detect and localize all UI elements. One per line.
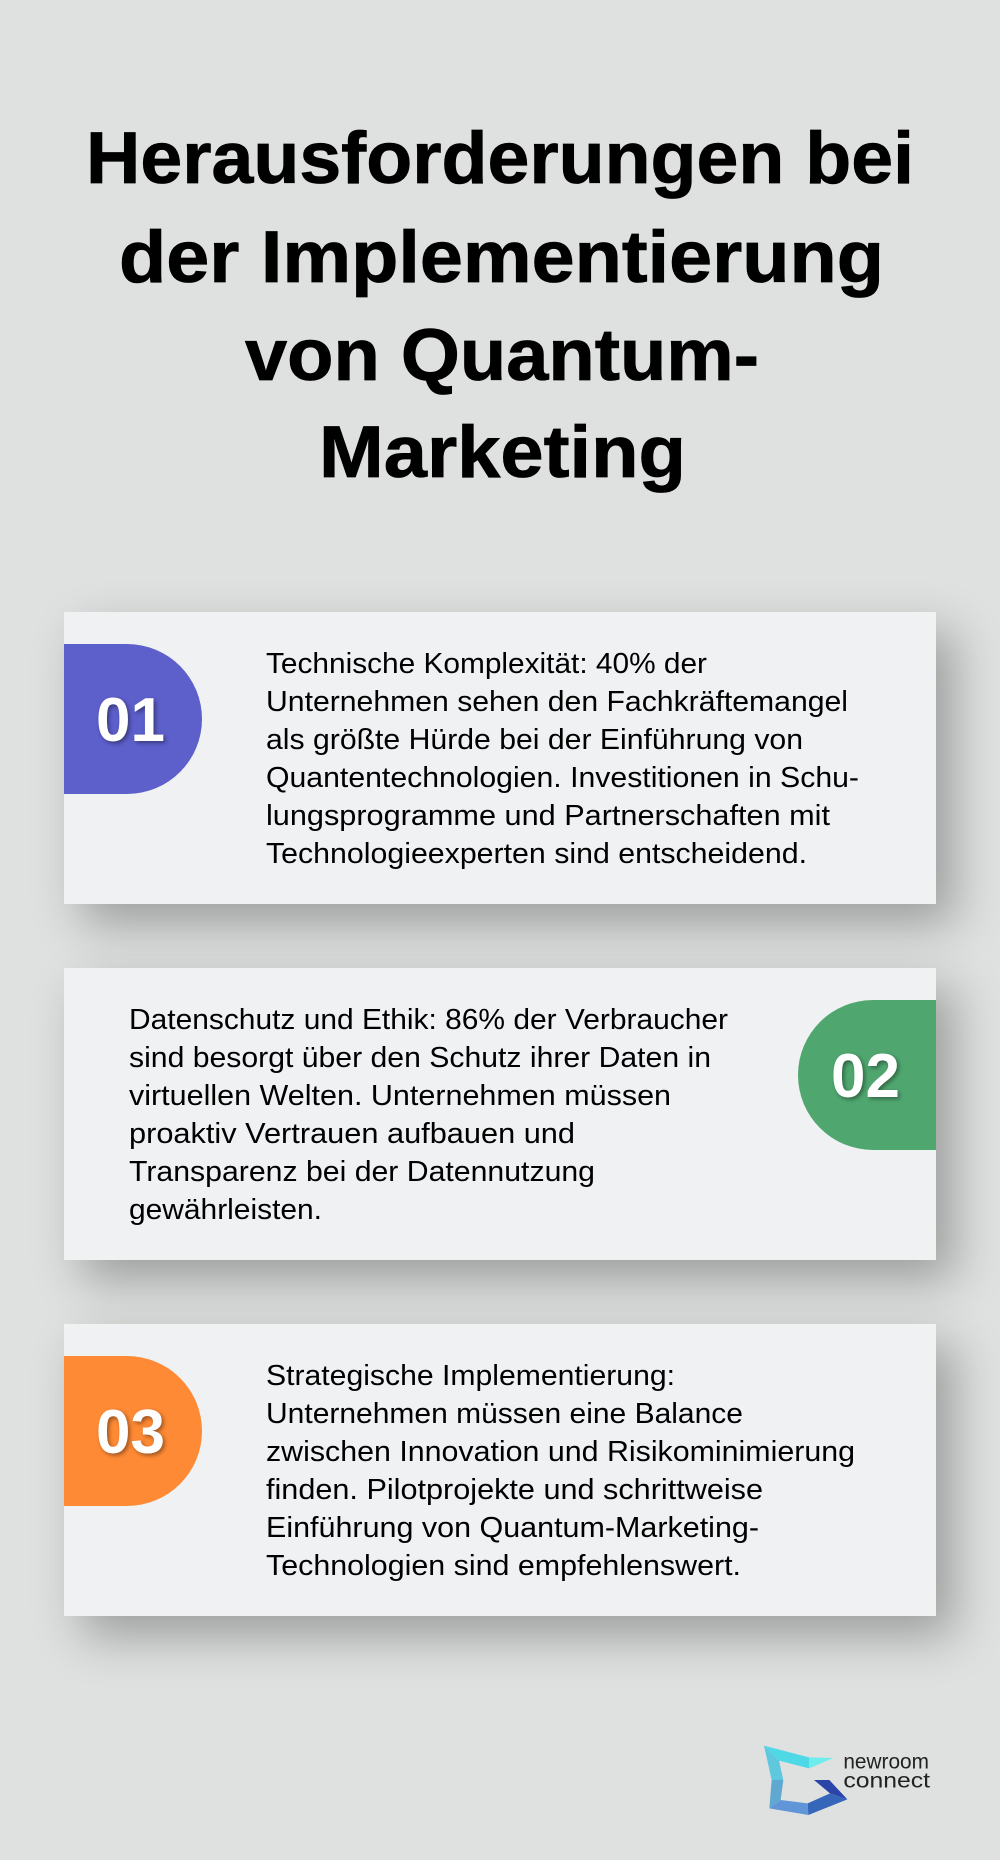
text: Datenschutz und Ethik: Transparenz bei der Datennutzung [129, 1156, 595, 1188]
badge 02: 02 [831, 1042, 900, 1111]
text: Datenschutz und Ethik: virtuellen Welten. Unternehmen müssen [129, 1080, 671, 1112]
text: Datenschutz und Ethik: proaktiv Vertrauen aufbauen und [129, 1118, 575, 1150]
badge 01 [64, 644, 202, 794]
text: Technische Komplexität: Quantentechnologien. Investitionen in Schu- [266, 762, 859, 794]
title: der Implementierung [119, 217, 884, 298]
text: Datenschutz und Ethik: gewährleisten. [129, 1194, 322, 1226]
text: Datenschutz und Ethik: sind besorgt über den Schutz ihrer Daten in [129, 1042, 711, 1074]
text: Technische Komplexität: Technologieexperten sind entscheidend. [266, 838, 807, 870]
text: Technische Komplexität: Technische Komplexität: 40% der [266, 648, 708, 680]
panel: card 3 [64, 1324, 936, 1616]
text: Strategische Implementierung: Strategische Implementierung: [266, 1360, 675, 1392]
logo: newroom connect: connect [843, 1769, 930, 1792]
text: Technische Komplexität: Unternehmen sehen den Fachkräftemangel [266, 686, 848, 718]
badge 02 [798, 1000, 936, 1150]
panel: card 1 [64, 612, 936, 904]
text: Technische Komplexität: lungsprogramme und Partnerschaften mit [266, 800, 830, 832]
panel: card 2 [64, 968, 936, 1260]
text: Strategische Implementierung: finden. Pilotprojekte und schrittweise [266, 1474, 763, 1506]
logo: newroom connect [764, 1746, 930, 1815]
text: Strategische Implementierung: Unternehmen müssen eine Balance [266, 1398, 743, 1430]
text: Strategische Implementierung [266, 1360, 855, 1582]
badge 03 [64, 1356, 202, 1506]
text: Strategische Implementierung: Einführung von Quantum-Marketing- [266, 1512, 759, 1544]
title: Marketing [319, 412, 686, 493]
badge 03: 03 [96, 1398, 165, 1467]
title: von Quantum- [245, 315, 759, 396]
text: Datenschutz und Ethik [129, 1004, 729, 1226]
title [86, 118, 914, 493]
text: Technische Komplexität: als größte Hürde bei der Einführung von [266, 724, 803, 756]
logo: newroom connect: newroom [843, 1750, 929, 1773]
text: Datenschutz und Ethik: Datenschutz und Ethik: 86% der Verbraucher [129, 1004, 729, 1036]
title: Herausforderungen bei [86, 118, 914, 199]
badge 01: 01 [96, 686, 165, 755]
text: Strategische Implementierung: zwischen Innovation und Risikominimierung [266, 1436, 855, 1468]
text: Technische Komplexität [266, 648, 859, 870]
text: Strategische Implementierung: Technologien sind empfehlenswert. [266, 1550, 741, 1582]
